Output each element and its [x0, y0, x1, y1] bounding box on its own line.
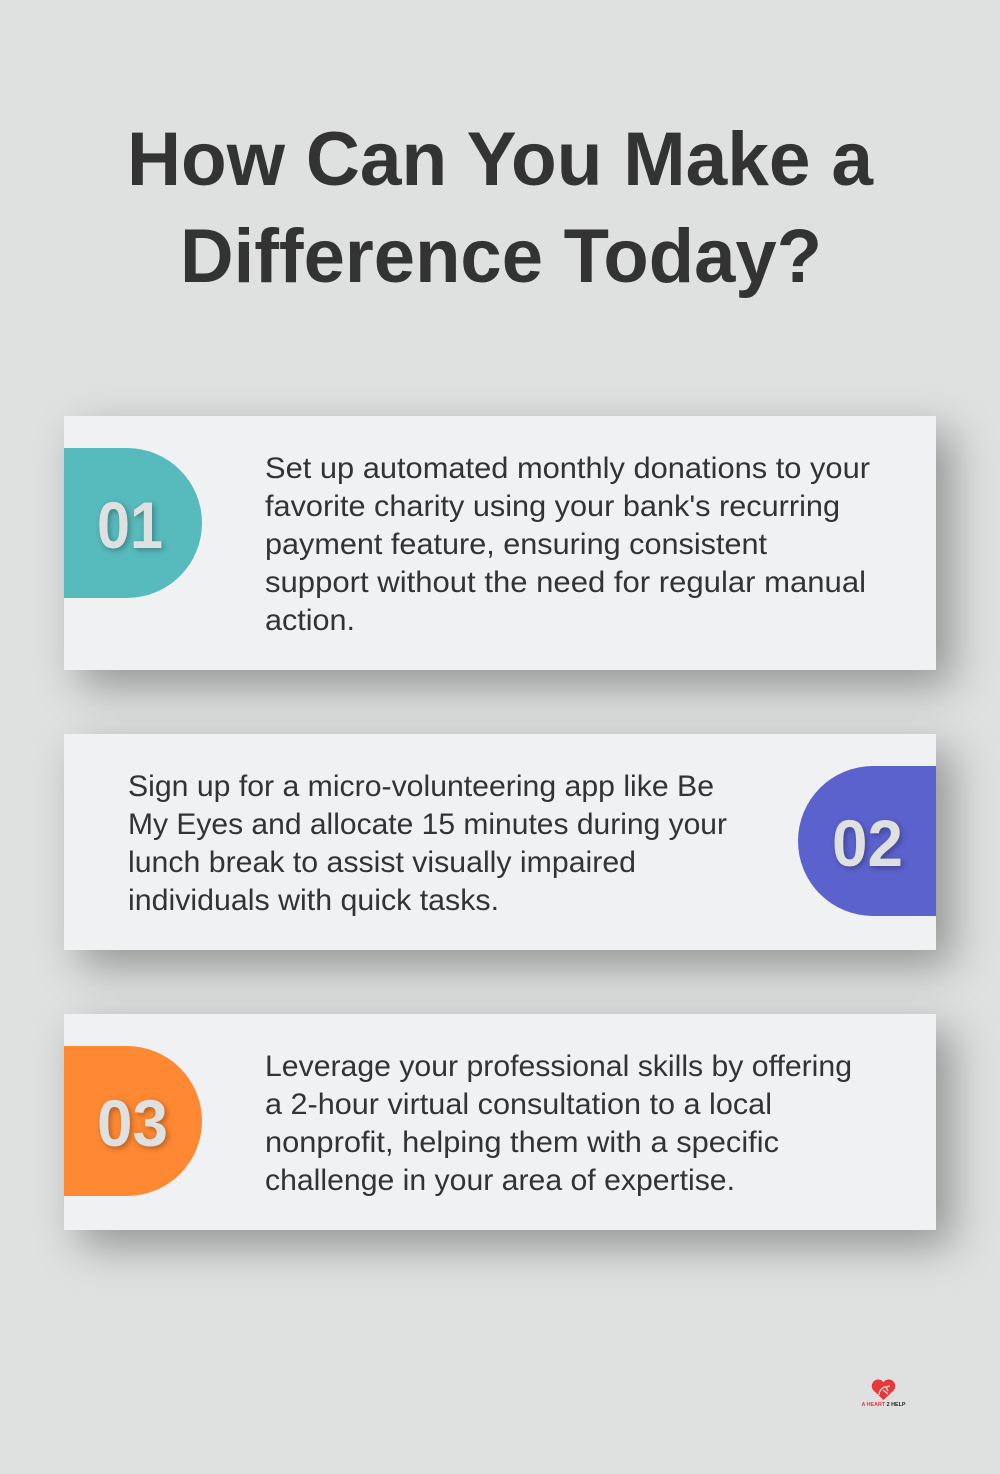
- panel: step 03: [64, 1014, 936, 1230]
- number badge 03: [64, 1046, 202, 1196]
- step 03 text: nonprofit, helping them with a specific: [265, 1126, 779, 1159]
- number 03: 03: [97, 1086, 168, 1160]
- step 01 text: action.: [265, 604, 355, 637]
- step 01 text: Set up automated monthly donations to your: [265, 452, 870, 485]
- number badge 02: [798, 766, 936, 916]
- step 02 text: Sign up for a micro-volunteering app like Be: [128, 770, 714, 803]
- icon: heart: [872, 1380, 895, 1400]
- step 03 text: [265, 1050, 852, 1197]
- title: How Can You Make a: [127, 117, 874, 202]
- number badge 01: [64, 448, 202, 598]
- title: Difference Today?: [180, 214, 822, 299]
- logo: A Heart 2 Help: [862, 1380, 906, 1408]
- step 01 text: payment feature, ensuring consistent: [265, 528, 768, 561]
- step 02 text: My Eyes and allocate 15 minutes during your: [128, 808, 727, 841]
- step 03 text: challenge in your area of expertise.: [265, 1164, 735, 1197]
- number 02: 02: [832, 806, 903, 880]
- logo wordmark: A HEART 2 HELP: [862, 1402, 906, 1408]
- number 01: 01: [97, 488, 163, 562]
- step 02 text: [128, 770, 727, 917]
- step 01 text: favorite charity using your bank's recurring: [265, 490, 840, 523]
- step 02 text: individuals with quick tasks.: [128, 884, 499, 917]
- step 03 text: Leverage your professional skills by offering: [265, 1050, 852, 1083]
- panel: step 01: [64, 416, 936, 670]
- step 01 text: [265, 452, 870, 637]
- step 03 text: a 2-hour virtual consultation to a local: [265, 1088, 772, 1121]
- step 02 text: lunch break to assist visually impaired: [128, 846, 636, 879]
- panel: step 02: [64, 734, 936, 950]
- step 01 text: support without the need for regular manual: [265, 566, 866, 599]
- title: [127, 117, 874, 299]
